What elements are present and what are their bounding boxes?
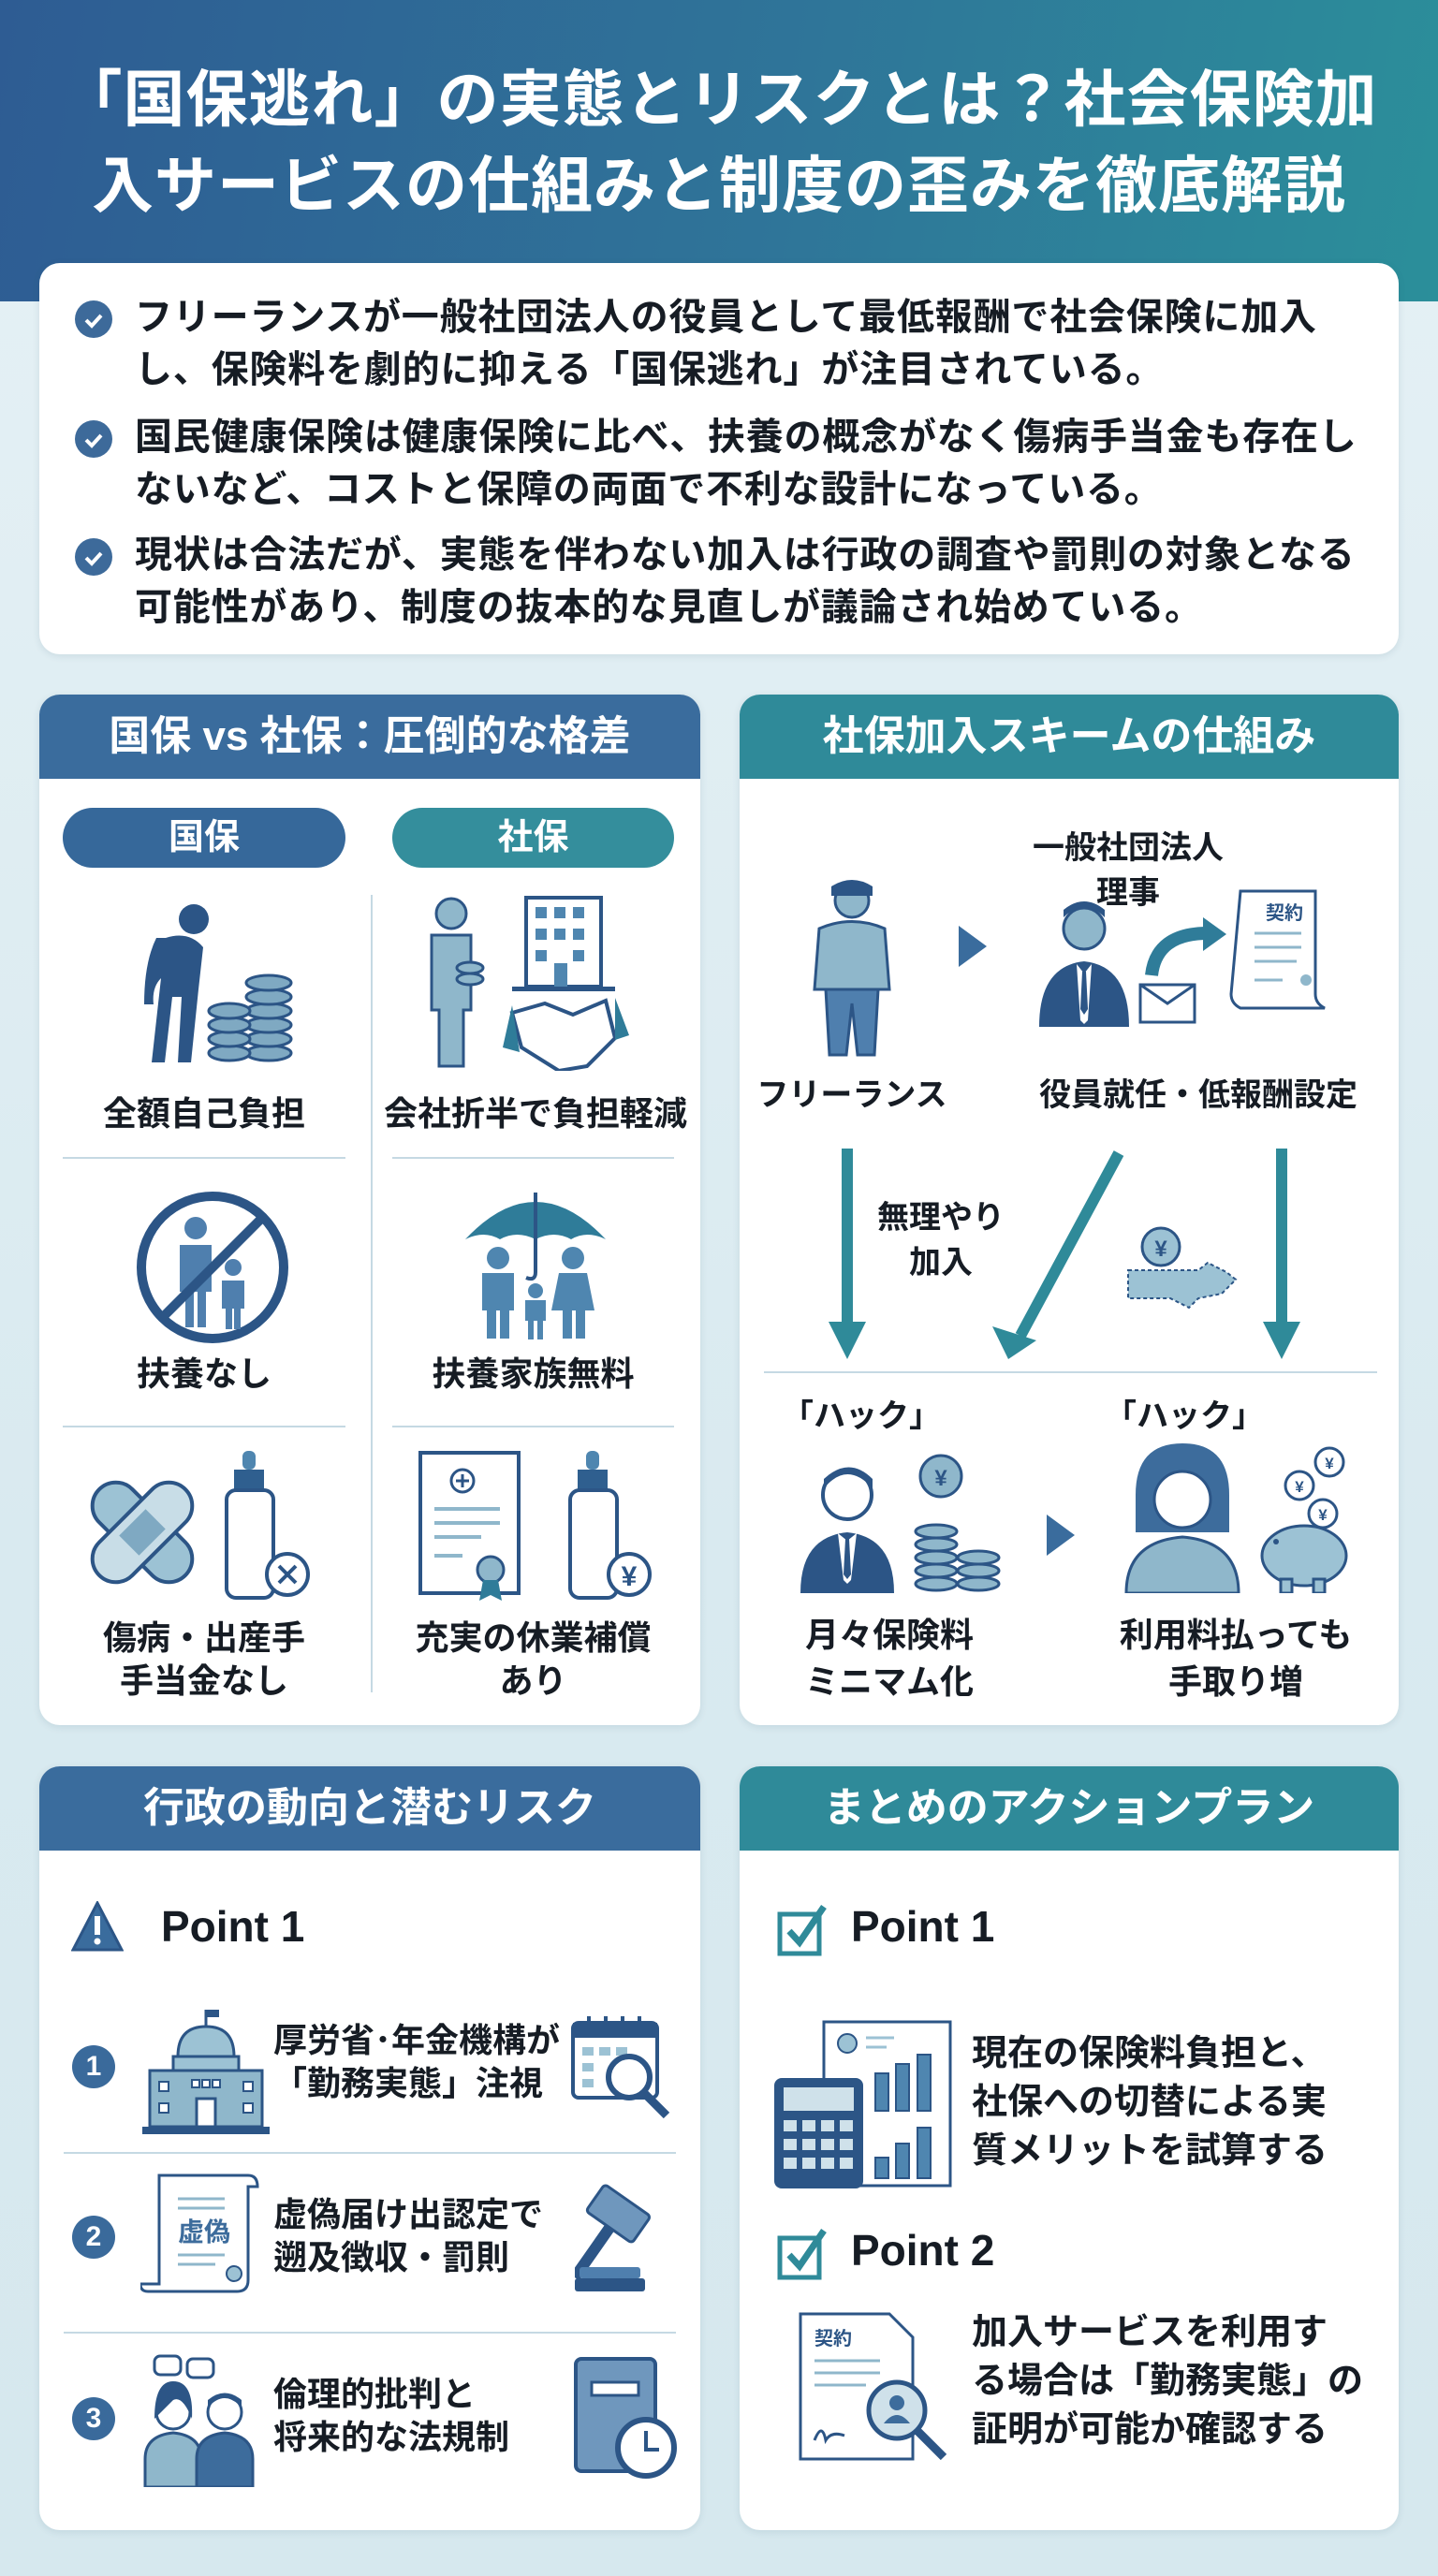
label: free dependents: 扶養家族無料 — [432, 1354, 635, 1393]
panel heading — [740, 695, 1399, 779]
bullet 2: 国民健康保険は健康保険に比べ、扶養の概念がなく傷病手当金も存在し — [135, 417, 1357, 458]
panel heading — [740, 1766, 1399, 1851]
arrow: right triangle 2 — [1047, 1515, 1075, 1556]
icon: critics pair — [144, 2355, 255, 2487]
text: risk 2: 遡及徴収・罰則 — [273, 2238, 509, 2276]
label: leave compensation — [415, 1618, 652, 1700]
label: no sickness benefit: 傷病・出産手 — [103, 1618, 305, 1657]
label: take-home increase: 利用料払っても — [1120, 1616, 1352, 1654]
bullet 3 — [75, 534, 1356, 628]
panel heading: まとめのアクションプラン — [824, 1785, 1314, 1831]
number 1 — [72, 2045, 115, 2088]
icon: contract with magnifier — [796, 2309, 960, 2468]
label: minimize premium: ミニマム化 — [805, 1662, 974, 1701]
panel heading — [39, 1766, 700, 1851]
label: full self burden: 全額自己負担 — [103, 1094, 305, 1133]
bullet 3: 可能性があり、制度の抜本的な見直しが議論され始めている。 — [135, 587, 1203, 628]
text: action 2 — [972, 2308, 1363, 2454]
bullet 1 — [75, 297, 1317, 390]
icon: law book with clock — [574, 2357, 677, 2479]
text: risk 2 — [273, 2195, 543, 2276]
icon: check box 1 — [777, 1905, 827, 1956]
label: leave compensation: 充実の休業補償 — [415, 1618, 652, 1657]
label: freelancer: フリーランス — [756, 1077, 947, 1113]
text: action 2: 証明が可能か確認する — [972, 2410, 1328, 2450]
icon: yen money flow — [1127, 1226, 1238, 1309]
label: hack right: 「ハック」 — [1105, 1398, 1264, 1434]
icon: gavel — [575, 2185, 651, 2291]
arrow: right triangle — [959, 926, 987, 967]
label: no sickness benefit — [103, 1618, 305, 1700]
text: risk 3: 将来的な法規制 — [273, 2418, 509, 2456]
icon: freelancer — [813, 880, 891, 1056]
icon: false document scroll: 虚偽 — [178, 2217, 230, 2247]
panel: action plan — [740, 1766, 1399, 2530]
label: director: 理事 — [1096, 875, 1160, 911]
text: action 2: 加入サービスを利用す — [972, 2313, 1328, 2352]
icon: employer share — [431, 896, 629, 1071]
icon: businessman with coins — [800, 1455, 1000, 1593]
text: action 1 — [972, 2034, 1328, 2171]
icon: woman with piggy bank — [1125, 1443, 1348, 1593]
label: forced joining: 加入 — [909, 1245, 973, 1281]
icon: burdened person with coins — [144, 904, 292, 1062]
text: risk 3 — [273, 2375, 509, 2456]
icon: director with envelope and contract: 契約 — [1266, 902, 1303, 924]
label: forced joining — [877, 1200, 1005, 1281]
label: director — [1033, 830, 1224, 911]
label: no dependents: 扶養なし — [137, 1354, 271, 1393]
panel: risks — [39, 1766, 700, 2530]
pill: shaho — [392, 808, 674, 868]
text: risk 2: 虚偽届け出認定で — [273, 2195, 543, 2233]
icon: bandage and bottle — [90, 1451, 310, 1600]
label: forced joining: 無理やり — [877, 1200, 1005, 1236]
text: risk 3: 倫理的批判と — [273, 2375, 476, 2413]
icon: yen money flow: ¥ — [1154, 1237, 1167, 1262]
label: half burden: 会社折半で負担軽減 — [384, 1094, 687, 1133]
label: point 1: Point 1 — [851, 1902, 994, 1951]
icon: woman with piggy bank: ¥ — [1318, 1506, 1328, 1524]
bullet 2 — [75, 417, 1357, 510]
text: action 1: 社保への切替による実 — [972, 2083, 1327, 2122]
number 2: 2 — [86, 2221, 101, 2252]
number 1: 1 — [86, 2051, 101, 2082]
label: minimize premium: 月々保険料 — [805, 1616, 974, 1654]
title: 「国保逃れ」の実態とリスクとは？社会保険加 — [60, 65, 1378, 134]
label: hack left: 「ハック」 — [782, 1398, 941, 1434]
pill: shaho: 社保 — [497, 818, 569, 857]
label: minimize premium — [805, 1616, 974, 1701]
label: point 1: Point 1 — [161, 1902, 304, 1951]
arrow: down right — [1263, 1149, 1300, 1359]
label: point 2: Point 2 — [851, 2226, 994, 2275]
icon: director with envelope and contract — [1039, 889, 1326, 1027]
title — [60, 65, 1378, 220]
icon: calculator and charts — [774, 2020, 951, 2188]
icon: woman with piggy bank: ¥ — [1325, 1455, 1334, 1472]
icon: no dependents — [137, 1192, 288, 1343]
icon: certificate and bottle: ¥ — [622, 1561, 638, 1592]
icon: government building — [142, 2010, 270, 2134]
icon: businessman with coins: ¥ — [934, 1466, 947, 1491]
icon: umbrella family — [465, 1193, 606, 1339]
summary card — [39, 263, 1399, 654]
header band — [0, 0, 1438, 301]
label: appointment: 役員就任・低報酬設定 — [1039, 1077, 1357, 1113]
arrow: down left — [829, 1149, 866, 1359]
text: action 1: 現在の保険料負担と、 — [972, 2034, 1326, 2073]
bullet 1: フリーランスが一般社団法人の役員として最低報酬で社会保険に加入 — [135, 297, 1317, 338]
text: action 1: 質メリットを試算する — [972, 2131, 1328, 2171]
panel: comparison — [39, 695, 700, 1725]
text: risk 1: 「勤務実態」注視 — [273, 2064, 543, 2102]
arrow: diagonal — [992, 1150, 1123, 1359]
icon: woman with piggy bank: ¥ — [1295, 1478, 1304, 1496]
panel heading: 国保 vs 社保：圧倒的な格差 — [109, 713, 631, 759]
text: risk 1: 厚労省･年金機構が — [273, 2021, 560, 2059]
bullet 3: 現状は合法だが、実態を伴わない加入は行政の調査や罰則の対象となる — [135, 534, 1356, 576]
bullet 1: し、保険料を劇的に抑える「国保逃れ」が注目されている。 — [135, 349, 1164, 390]
title: 入サービスの仕組みと制度の歪みを徹底解説 — [92, 151, 1346, 220]
number 3 — [72, 2397, 115, 2440]
number 3: 3 — [86, 2403, 101, 2434]
text: risk 1 — [273, 2021, 560, 2102]
label: take-home increase: 手取り増 — [1168, 1662, 1303, 1701]
panel heading: 行政の動向と潜むリスク — [143, 1785, 596, 1831]
icon: calendar with magnifier — [571, 2016, 670, 2119]
icon: check box 2 — [777, 2229, 827, 2280]
panel heading: 社保加入スキームの仕組み — [823, 713, 1315, 759]
label: take-home increase — [1120, 1616, 1352, 1701]
label: leave compensation: あり — [499, 1661, 567, 1700]
label: no sickness benefit: 手当金なし — [120, 1661, 288, 1700]
icon: contract with magnifier: 契約 — [814, 2328, 852, 2349]
icon: warning — [71, 1901, 124, 1951]
panel heading — [39, 695, 700, 779]
icon: false document scroll — [140, 2174, 258, 2293]
pill: kokuho: 国保 — [169, 818, 240, 857]
panel: scheme — [740, 695, 1399, 1725]
bullet 2: ないなど、コストと保障の両面で不利な設計になっている。 — [135, 469, 1163, 510]
icon: certificate and bottle — [418, 1451, 652, 1601]
text: action 2: る場合は「勤務実態」の — [972, 2362, 1363, 2401]
pill: kokuho — [63, 808, 345, 868]
number 2 — [72, 2216, 115, 2259]
label: director: 一般社団法人 — [1033, 830, 1224, 866]
